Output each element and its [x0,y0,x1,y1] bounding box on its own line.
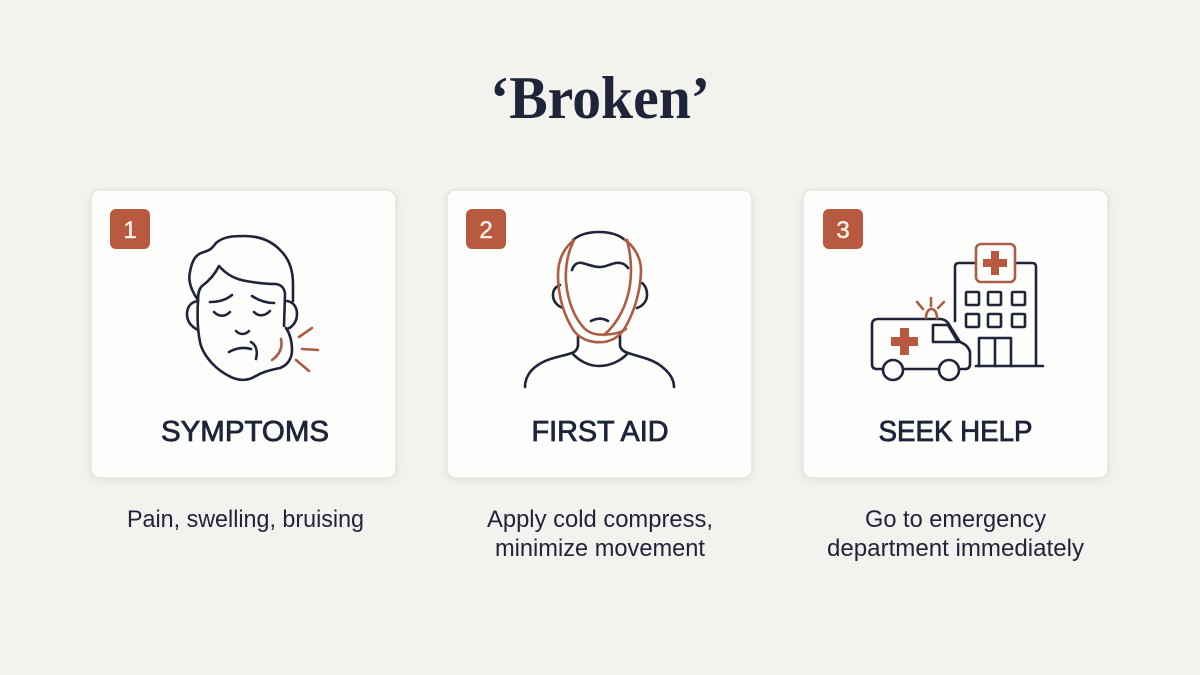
step badge 2 [466,209,506,249]
step badge 1: 1 [123,217,137,244]
icon: head with bandage [525,232,674,387]
description: seek help: department immediately [827,535,1084,562]
step badge 1 [110,209,150,249]
icon: hospital [955,244,1043,366]
heading: symptoms: SYMPTOMS [161,416,329,448]
step badge 2: 2 [479,217,493,244]
description: seek help [827,506,1084,562]
title: ‘Broken’ [490,65,710,131]
panel: seek help [803,190,1108,478]
step badge 3: 3 [836,217,850,244]
description: seek help: Go to emergency [865,506,1046,533]
panel: first aid [447,190,752,478]
heading: seek help: SEEK HELP [878,416,1032,448]
step badge 3 [823,209,863,249]
icon: swollen face [187,236,318,380]
description: symptoms: Pain, swelling, bruising [127,506,364,533]
icon: ambulance [872,298,970,380]
description: first aid [487,506,713,562]
description: first aid: minimize movement [495,535,705,562]
description: first aid: Apply cold compress, [487,506,713,533]
heading: first aid: FIRST AID [532,416,668,448]
panel: symptoms [91,190,396,478]
